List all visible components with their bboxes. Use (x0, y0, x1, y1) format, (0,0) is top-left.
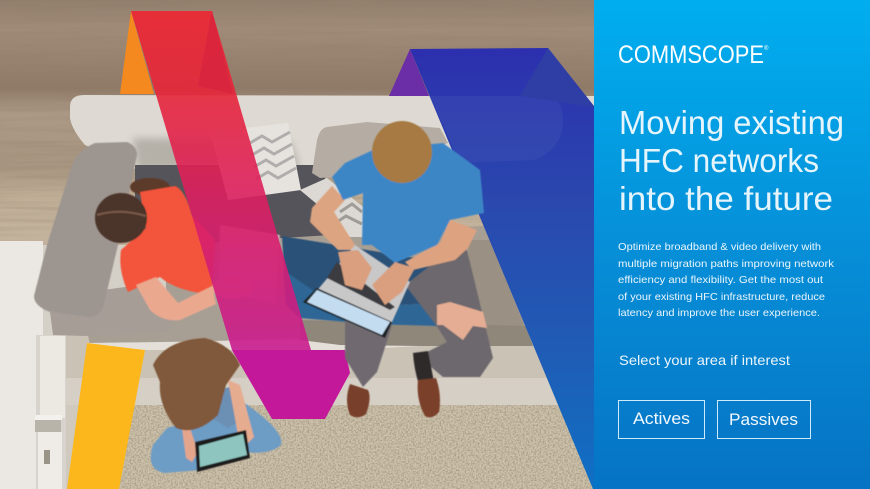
description text: latency and improve the user experience. (618, 307, 820, 319)
description text: Optimize broadband & video delivery with (618, 241, 821, 253)
purple triangle (389, 49, 429, 96)
prompt text: Select your area if interest (619, 352, 790, 368)
woman laptop (218, 225, 280, 305)
woman hand (212, 277, 252, 299)
woman hair part (97, 212, 146, 216)
man shoe right (418, 378, 440, 417)
logo: COMMSCOPE (618, 41, 764, 69)
panel: right blue panel (594, 0, 870, 489)
description text (618, 241, 835, 319)
wood floor (0, 0, 594, 245)
woman (95, 178, 440, 326)
man shirt (332, 143, 484, 263)
title: Moving existing (619, 104, 844, 141)
yellow band (67, 343, 145, 489)
logo: ® (764, 45, 769, 52)
button: Actives (618, 400, 704, 438)
woman hair bun (130, 178, 170, 196)
blue band sofa ghost (430, 96, 563, 163)
child arm left (182, 428, 198, 462)
woman hair (95, 193, 147, 243)
child hair (153, 338, 240, 430)
sofa seat cushions (88, 225, 526, 345)
grey sofa arm cushion (34, 142, 137, 317)
button: Passives (718, 400, 810, 438)
child shirt (212, 385, 242, 428)
chevron pillow (210, 123, 301, 200)
title: into the future (619, 180, 833, 217)
woman lower leg (283, 270, 440, 326)
sofa front stripe (300, 320, 533, 346)
man sock right (413, 351, 434, 388)
carpet (118, 405, 594, 489)
chevron pillow behind man (300, 178, 367, 237)
woman arm (136, 277, 216, 320)
title (619, 104, 844, 217)
description text: multiple migration paths improving network (618, 258, 835, 270)
sofa right arm (467, 240, 526, 330)
child (151, 338, 281, 473)
woman shirt (120, 186, 215, 294)
sofa front edge (88, 340, 420, 350)
man arm right (405, 220, 477, 270)
sofa back (70, 95, 594, 170)
floor under sofa (40, 335, 594, 489)
man (303, 121, 493, 417)
shelf unit (0, 241, 66, 489)
button: Actives: Actives (633, 409, 690, 428)
man shoe left (347, 384, 370, 417)
sofa dark seat (135, 165, 325, 245)
man trousers lower (345, 305, 392, 387)
photo: family on sofa background (0, 0, 594, 489)
red band facet (198, 11, 233, 94)
man hands (338, 250, 415, 305)
man arm left (310, 186, 358, 250)
sofa back shadow (133, 138, 300, 170)
magenta band lower solid (232, 350, 350, 419)
middle cushion (90, 285, 175, 322)
description text: efficiency and flexibility. Get the most out (618, 274, 823, 286)
man thigh (405, 250, 493, 377)
child jeans (151, 395, 281, 473)
orange triangle (120, 11, 154, 94)
blue band (410, 48, 594, 489)
sofa (50, 95, 594, 350)
man feet (437, 302, 487, 340)
child arm right (228, 380, 254, 445)
lower left cushion (50, 312, 170, 336)
button: Passives: Passives (729, 410, 798, 429)
man laptop (303, 245, 410, 338)
tablet (195, 430, 250, 472)
description text: of your existing HFC infrastructure, reduce (618, 291, 825, 303)
red magenta band upper translucent (131, 11, 311, 350)
blue band facet (520, 48, 594, 107)
woman legs (282, 236, 440, 305)
title: HFC networks (619, 142, 819, 179)
grey pillow behind man (312, 122, 448, 178)
man head (372, 121, 432, 183)
